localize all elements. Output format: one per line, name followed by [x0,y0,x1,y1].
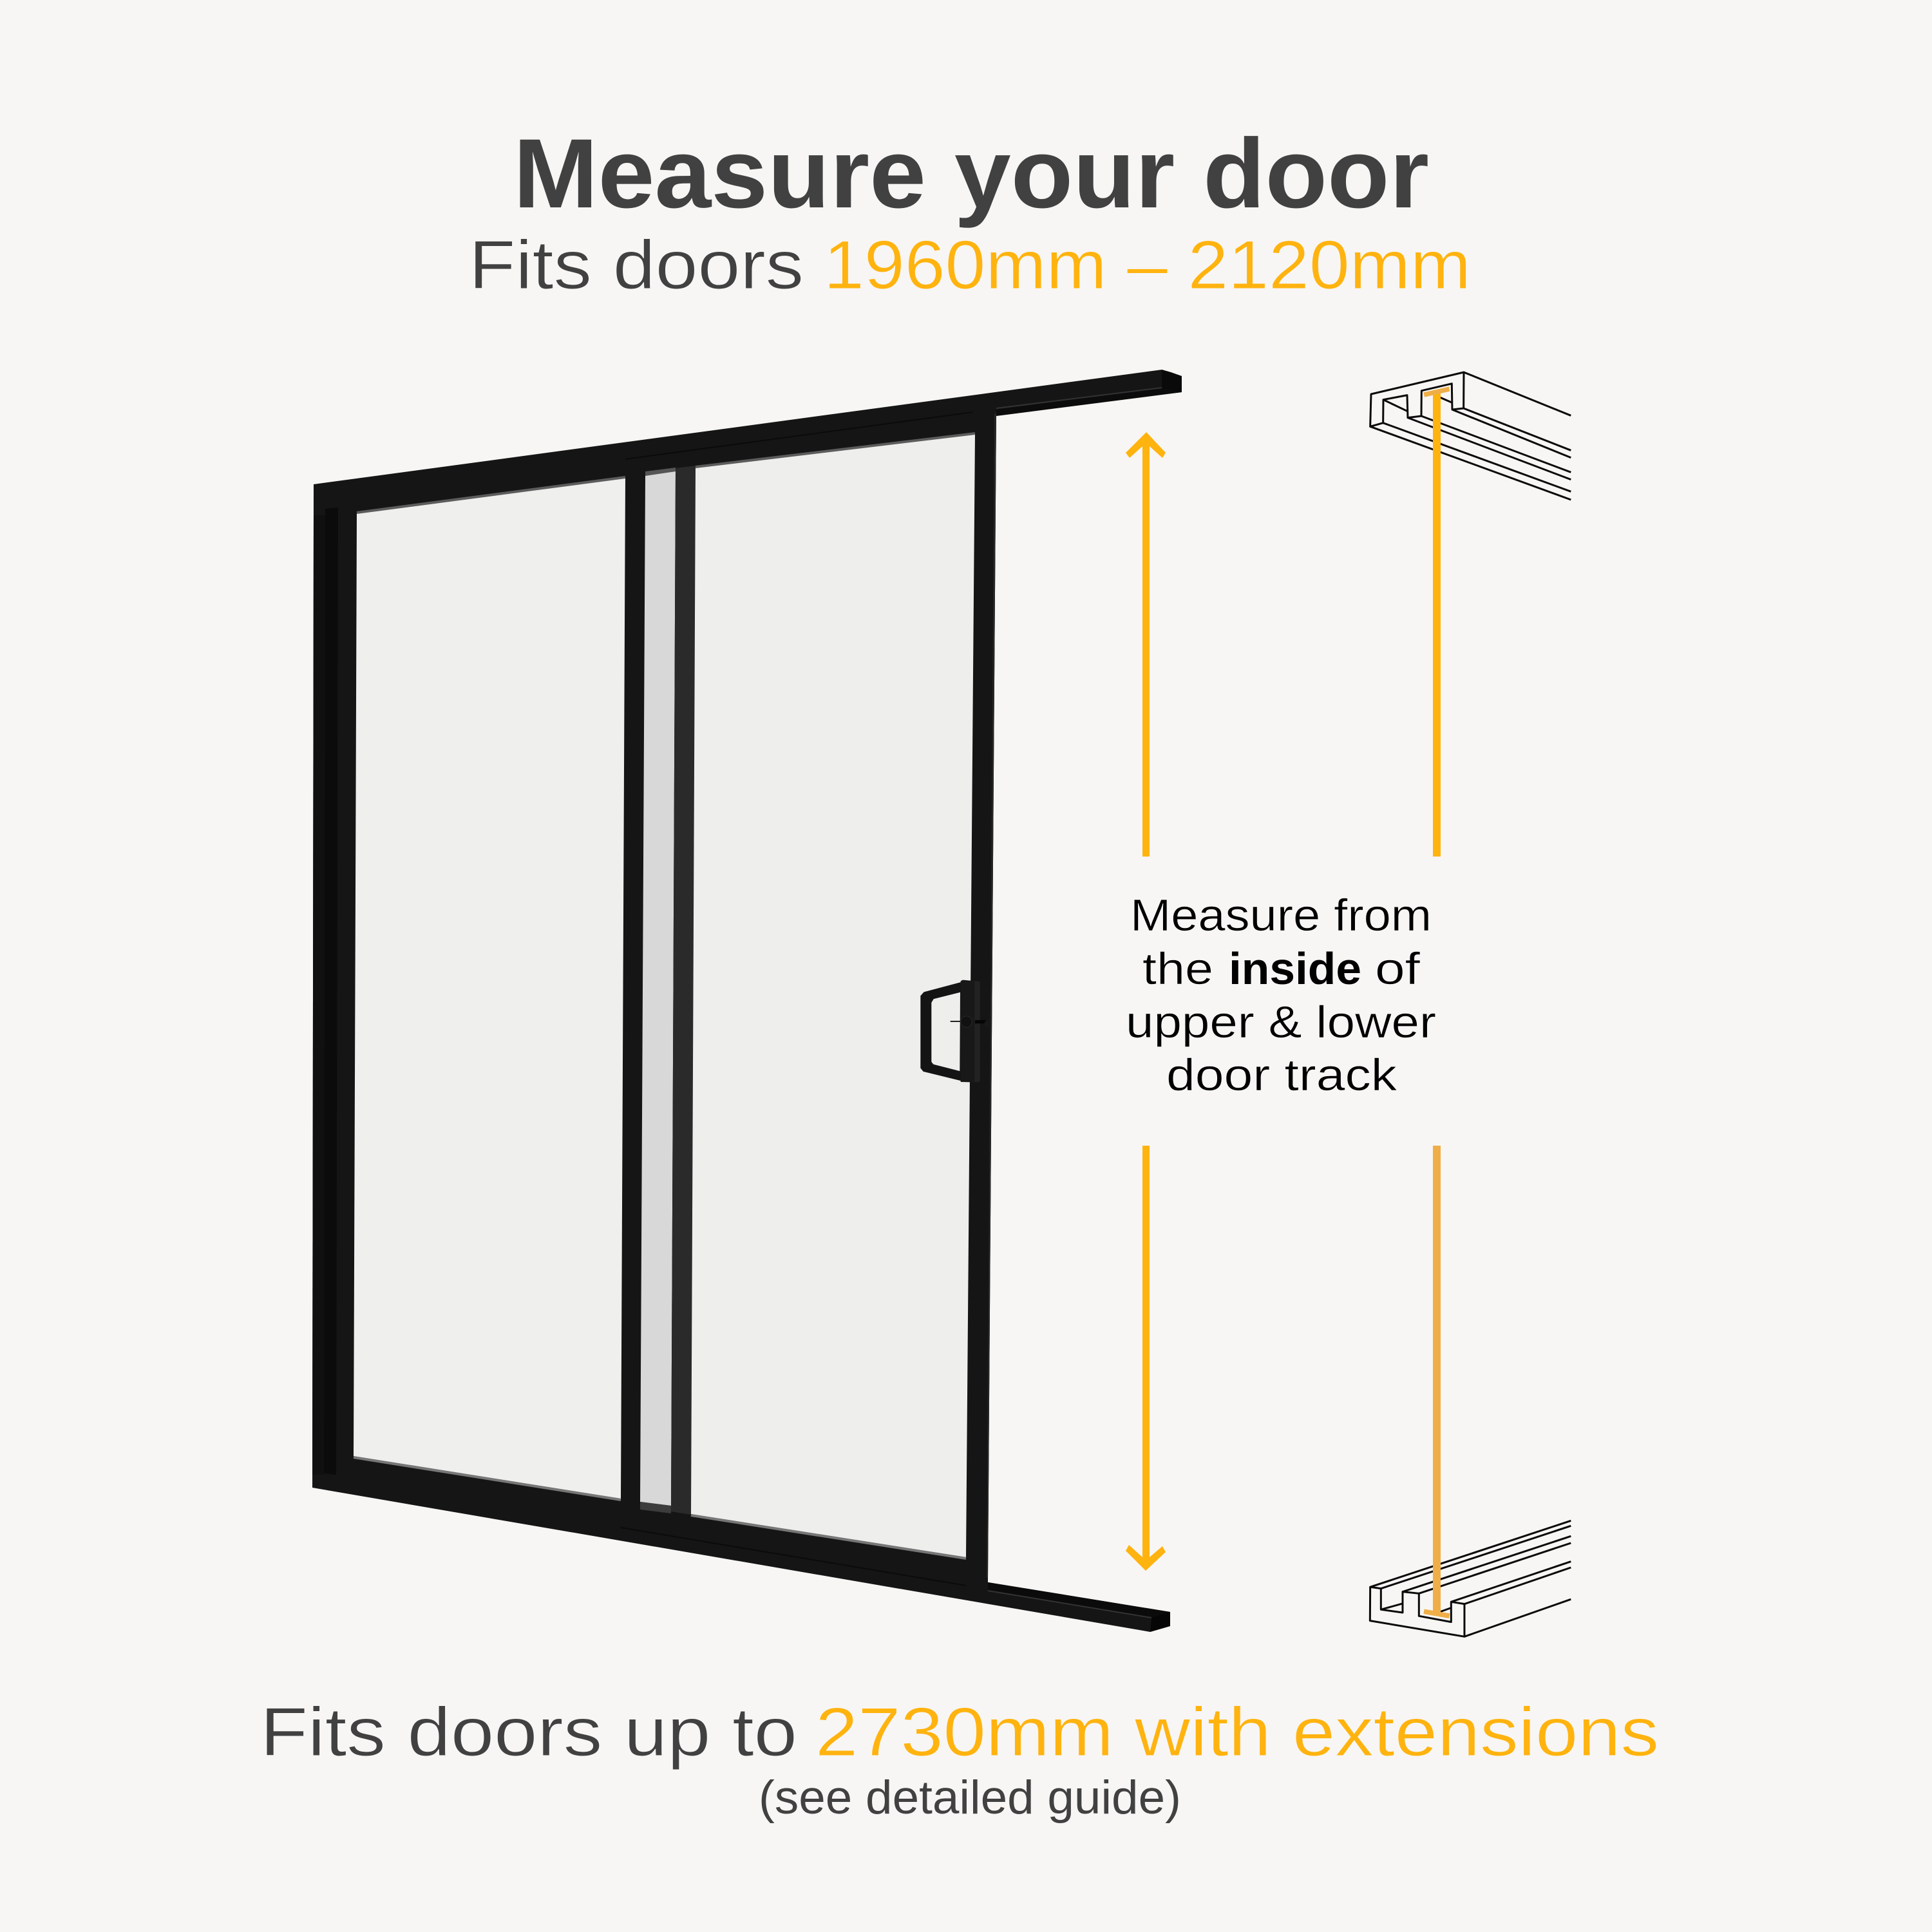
upper measure line [1423,386,1450,857]
instruction text: door track [1166,1050,1397,1100]
handle latch [951,1016,990,1027]
door frame and rails silhouette [312,370,1182,1632]
instruction text: of [1375,943,1421,994]
left frame jamb [312,507,338,1475]
subtitle: door size range: Fits doors [469,226,804,303]
right stile highlight [987,412,996,1578]
arrow: up [1126,432,1166,857]
instruction text: the [1142,943,1213,994]
handle grip [921,982,963,1081]
header and sill seam lines [621,412,972,1586]
footer: extension note [260,1693,1659,1770]
footer: extension note: Fits doors up to [260,1693,797,1770]
glass edge shadows [354,433,975,1558]
rail end details [988,370,1182,1632]
door illustration [312,370,1182,1632]
lower track diagram [1370,1520,1571,1636]
gap shadow bands [640,468,676,1513]
left glass panel [354,478,625,1499]
subtitle: door size range: 1960mm – 2120mm [824,226,1471,303]
footer: guide note: (see detailed guide) [759,1772,1181,1824]
door handle [921,980,990,1083]
gap glass [640,471,676,1506]
title: Measure your door [513,118,1429,229]
second door stile [671,466,696,1515]
instruction text [1126,890,1436,1100]
handle plate [961,980,980,1083]
upper track diagram [1370,372,1571,500]
instruction text: inside [1229,943,1361,994]
arrow: down [1126,1146,1166,1571]
footer: extension note: 2730mm with extensions [815,1693,1659,1770]
instruction text: upper & lower [1126,997,1436,1047]
lower measure line [1423,1146,1450,1618]
subtitle: door size range [469,226,1471,303]
right glass panel [691,434,975,1557]
instruction text: Measure from [1130,890,1432,940]
